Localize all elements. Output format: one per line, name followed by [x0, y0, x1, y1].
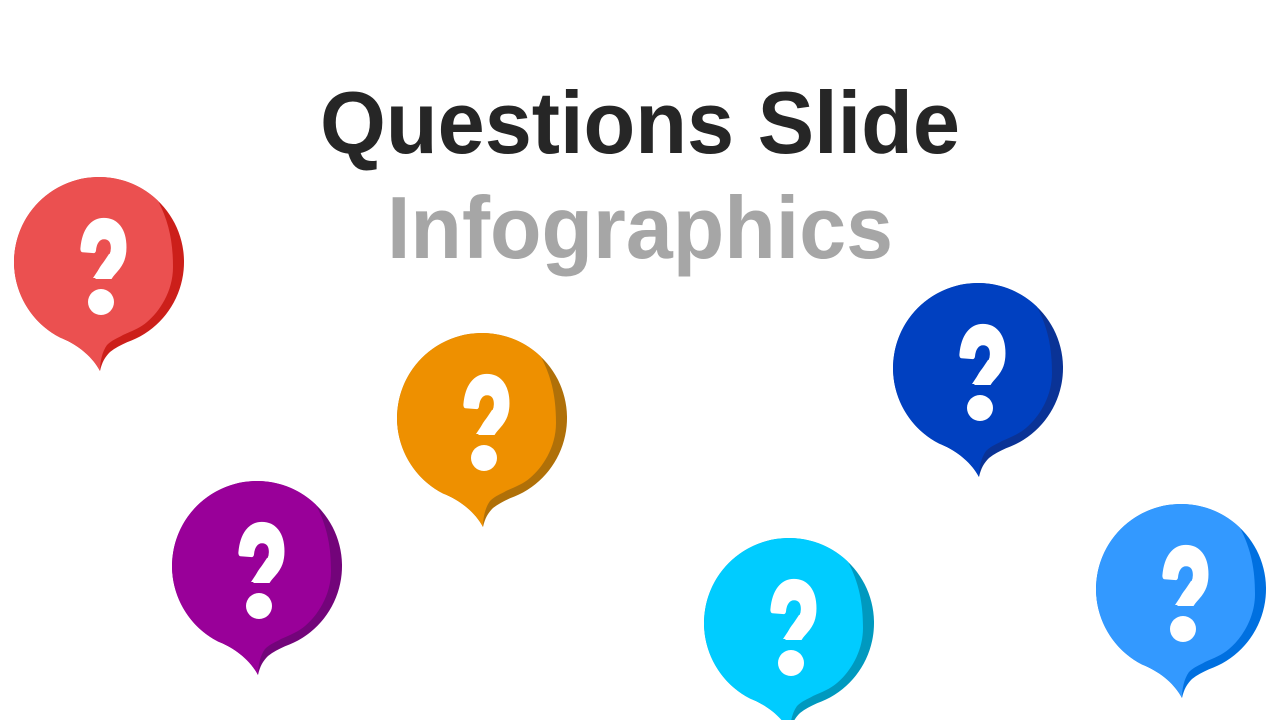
- icon: dark blue question bubble: [893, 283, 1063, 477]
- title: Questions Slide: Questions Slide: [320, 73, 960, 172]
- icon: cyan question bubble: [704, 538, 874, 720]
- icon: dark blue question bubble: ?: [958, 301, 1008, 448]
- icon: light blue question bubble: [1096, 504, 1266, 698]
- icon: orange question bubble: ?: [462, 351, 512, 498]
- icon: purple question bubble: [172, 481, 342, 675]
- icon: purple question bubble: ?: [237, 499, 287, 646]
- icon: orange question bubble: [397, 333, 567, 527]
- icon: cyan question bubble: ?: [769, 556, 819, 703]
- icon: red question bubble: ?: [79, 195, 129, 342]
- subtitle: Infographics: Infographics: [387, 178, 893, 277]
- icon: light blue question bubble: ?: [1161, 522, 1211, 669]
- icon: red question bubble: [14, 177, 184, 371]
